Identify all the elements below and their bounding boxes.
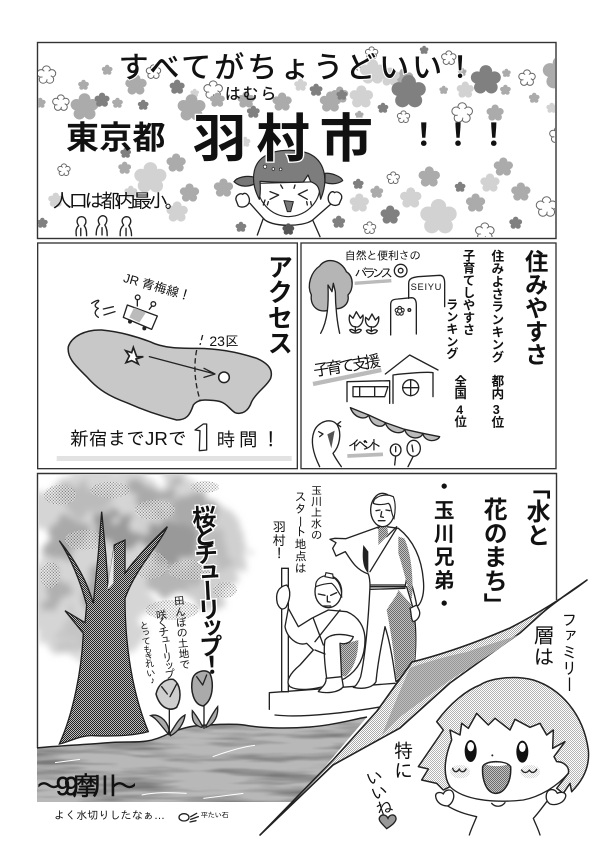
child-rearing support label: 子育て支援	[312, 351, 382, 381]
white highlight on branches	[107, 547, 114, 590]
icon: happy child	[312, 421, 341, 467]
exclamation marks: ！	[478, 118, 510, 153]
Tamagawa water note: 羽村！	[271, 520, 286, 560]
ranking: child-rearing nationwide: 4	[456, 403, 463, 417]
icon: balloons	[390, 440, 420, 467]
Tamagawa water note: 玉川上水の	[310, 484, 322, 541]
icon: three small people	[76, 216, 132, 236]
family note	[532, 611, 576, 691]
icon: tulips	[349, 312, 379, 334]
exclamation marks: ！	[408, 118, 440, 153]
ranking: livability in Tokyo	[489, 248, 504, 428]
tulip note: とってもきれい♪	[138, 619, 158, 685]
balance label: 自然と便利さの	[345, 249, 421, 262]
ranking: livability in Tokyo: 都内	[489, 374, 504, 401]
statue: seated brother	[277, 568, 365, 693]
dotted blossoms	[40, 481, 237, 620]
especially good note: いいね	[363, 765, 396, 817]
icon: shopping mall: SEIYU	[411, 282, 442, 292]
heading: access: アクセス	[264, 254, 292, 355]
heading: water and flowers town: 花のまち」	[479, 497, 507, 617]
character: cheering child	[418, 678, 589, 835]
ranking: child-rearing nationwide: ランキング	[444, 298, 458, 360]
ranking: child-rearing nationwide: 位	[453, 414, 467, 428]
monument stone base	[269, 683, 395, 716]
page fold	[260, 580, 587, 835]
river Tamagawa	[37, 717, 367, 802]
river bank line	[37, 717, 367, 748]
headline: すべてがちょうどいい！	[118, 52, 475, 84]
child hair	[418, 678, 589, 793]
balance label: バランス	[355, 266, 393, 280]
Shinjuku marker	[219, 372, 229, 383]
icon: heart	[379, 815, 396, 829]
icon: shopping mall	[391, 275, 445, 335]
exclamation marks: ！	[442, 118, 474, 153]
prefecture name: 東京都	[66, 120, 165, 155]
23 wards label: 23区	[209, 333, 239, 349]
travel time text: 時間！	[217, 429, 280, 450]
title text block	[52, 52, 510, 236]
stone skipping caption: よく水切りしたなぁ…	[54, 810, 165, 822]
Tamagawa brothers caption: ・玉川兄弟・	[430, 476, 454, 616]
family note: 層は	[532, 624, 554, 666]
dotted underline	[57, 456, 292, 461]
tulip note: 田んぼの土地で	[172, 594, 191, 670]
icon: flat stone	[179, 810, 229, 822]
tulip note	[138, 594, 191, 685]
child face	[450, 773, 568, 801]
character: cheering girl	[234, 150, 343, 237]
heading: water and flowers town	[479, 475, 550, 617]
travel time text: 新宿までJRで	[70, 428, 187, 449]
flower background pattern	[35, 46, 577, 240]
23 wards boundary	[195, 335, 203, 400]
train label: JR 青梅線！	[122, 270, 193, 304]
icon: flat stone: 平たい石	[201, 810, 229, 819]
icon: tulips	[151, 671, 218, 736]
family note: ファミリー	[560, 611, 576, 691]
icon: tree	[309, 261, 352, 334]
Tamagawa water note: スタート地点は	[294, 490, 308, 574]
city name: 羽村市	[193, 111, 373, 169]
cherry tree canopy	[25, 470, 250, 660]
arrow to Shinjuku	[149, 357, 215, 377]
exclamation marks	[408, 118, 510, 153]
panel: livability	[301, 243, 556, 469]
panel: water and flowers	[25, 470, 589, 835]
heading: livability: 住みやすさ	[522, 249, 548, 366]
map of Tokyo	[68, 330, 271, 420]
ranking: child-rearing nationwide: 子育てしやすさ	[461, 249, 475, 336]
panel: hero title	[35, 42, 577, 240]
ranking: child-rearing nationwide	[444, 249, 475, 428]
Tamagawa water note	[271, 484, 322, 574]
panel: access	[38, 243, 297, 469]
fold shaded inner band	[382, 635, 518, 735]
especially good note: 特に	[392, 739, 413, 781]
icon: bunting flags	[350, 408, 440, 441]
icon: train	[92, 295, 157, 330]
furigana: はむら	[225, 86, 276, 103]
ranking: child-rearing nationwide: 全国	[453, 374, 467, 400]
cherry and tulip heading: 桜とチューリップ！	[187, 504, 224, 675]
travel time text	[70, 424, 280, 451]
statue: standing brother	[330, 493, 424, 688]
heading: water and flowers town: 「水と	[522, 475, 550, 547]
event label: イベント	[347, 437, 382, 453]
river label: 〜99摩川〜	[36, 771, 138, 801]
especially good note	[363, 739, 413, 829]
cherry tree trunk	[59, 512, 167, 744]
balance label	[345, 249, 421, 283]
water highlights	[55, 745, 255, 798]
icon: nursery building	[347, 355, 438, 403]
population note: 人口は都内最小。	[52, 191, 184, 212]
tulip note: 咲くチューリップ	[154, 607, 176, 680]
icon: star Hamura	[126, 347, 143, 364]
ranking: livability in Tokyo: 位	[489, 414, 504, 428]
ranking: livability in Tokyo: 3	[493, 403, 500, 417]
ranking: livability in Tokyo: 住みよさランキング	[489, 248, 504, 364]
